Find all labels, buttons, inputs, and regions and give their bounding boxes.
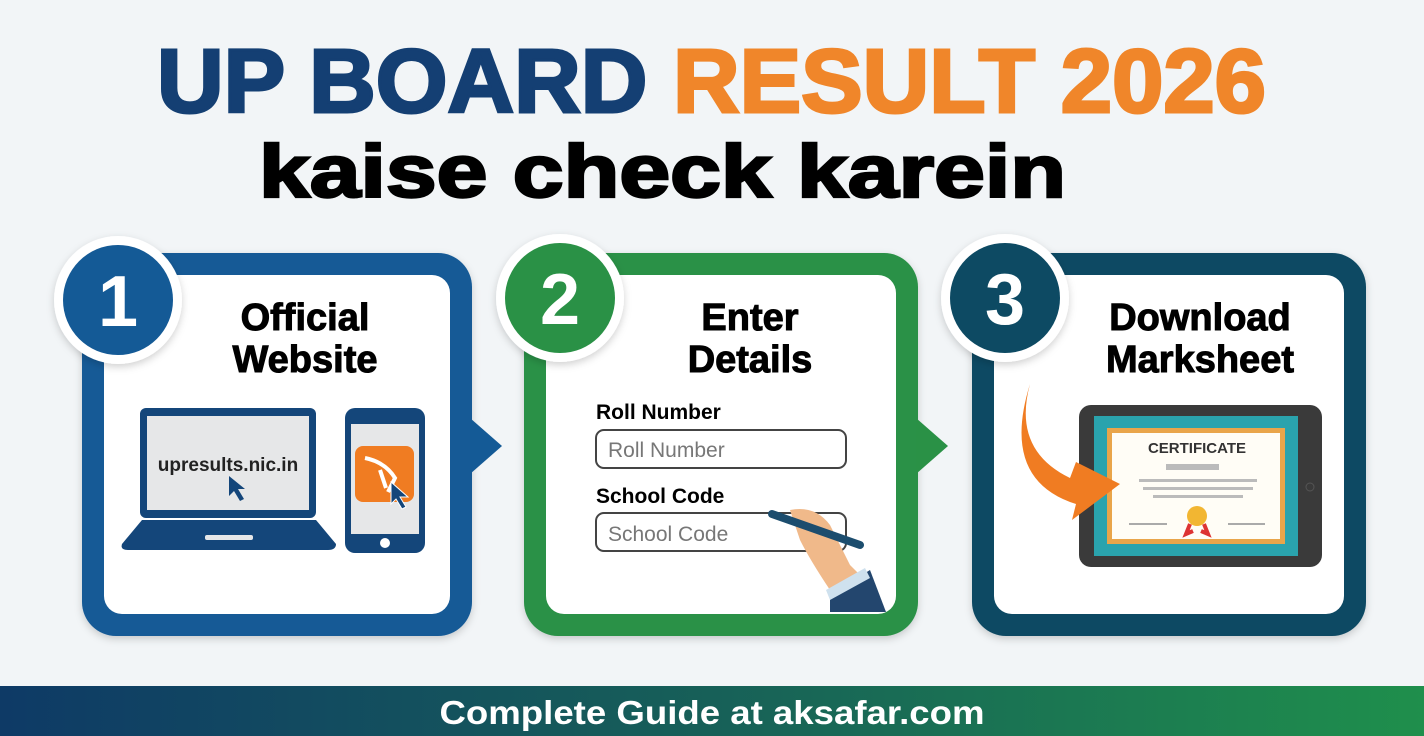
badge 3: 3 — [985, 260, 1025, 340]
form fields: Roll Number — [608, 439, 725, 462]
panel: step 3 download marksheet — [941, 234, 1366, 636]
badge 1 — [54, 236, 182, 364]
heading: Download Marksheet: Download — [1109, 297, 1291, 339]
heading: Official Website: Official — [241, 297, 369, 339]
badge 3 — [941, 234, 1069, 362]
badge 2 — [496, 234, 624, 362]
panel: step 1 official website — [54, 236, 502, 636]
icon: laptop — [122, 408, 336, 550]
title: UP BOARD RESULT 2026 — [157, 32, 1266, 132]
panel: step 1 official website: Website — [232, 339, 378, 381]
icon: laptop: upresults.nic.in — [158, 455, 298, 476]
footer banner — [0, 686, 1424, 736]
icon: phone — [345, 408, 425, 553]
icon: hand with pen — [772, 509, 886, 612]
badge 1: 1 — [98, 262, 138, 342]
form fields — [596, 401, 846, 551]
form fields: Roll Number — [596, 401, 721, 424]
form fields: School Code — [596, 485, 724, 508]
title — [157, 32, 1266, 213]
icon: tablet with certificate — [1079, 405, 1322, 567]
footer banner: Complete Guide at aksafar.com — [440, 694, 984, 731]
title: kaise check karein — [259, 130, 1066, 213]
form fields: School Code — [608, 523, 728, 546]
badge 2: 2 — [540, 260, 580, 340]
arrow: orange curved download arrow — [1022, 384, 1120, 520]
panel: step 3 download marksheet: Marksheet — [1106, 339, 1294, 381]
heading: Enter Details: Enter — [701, 297, 799, 339]
icon: tablet with certificate: CERTIFICATE — [1148, 440, 1246, 457]
panel: step 2 enter details — [496, 234, 948, 636]
panel: step 2 enter details: Details — [688, 339, 812, 381]
